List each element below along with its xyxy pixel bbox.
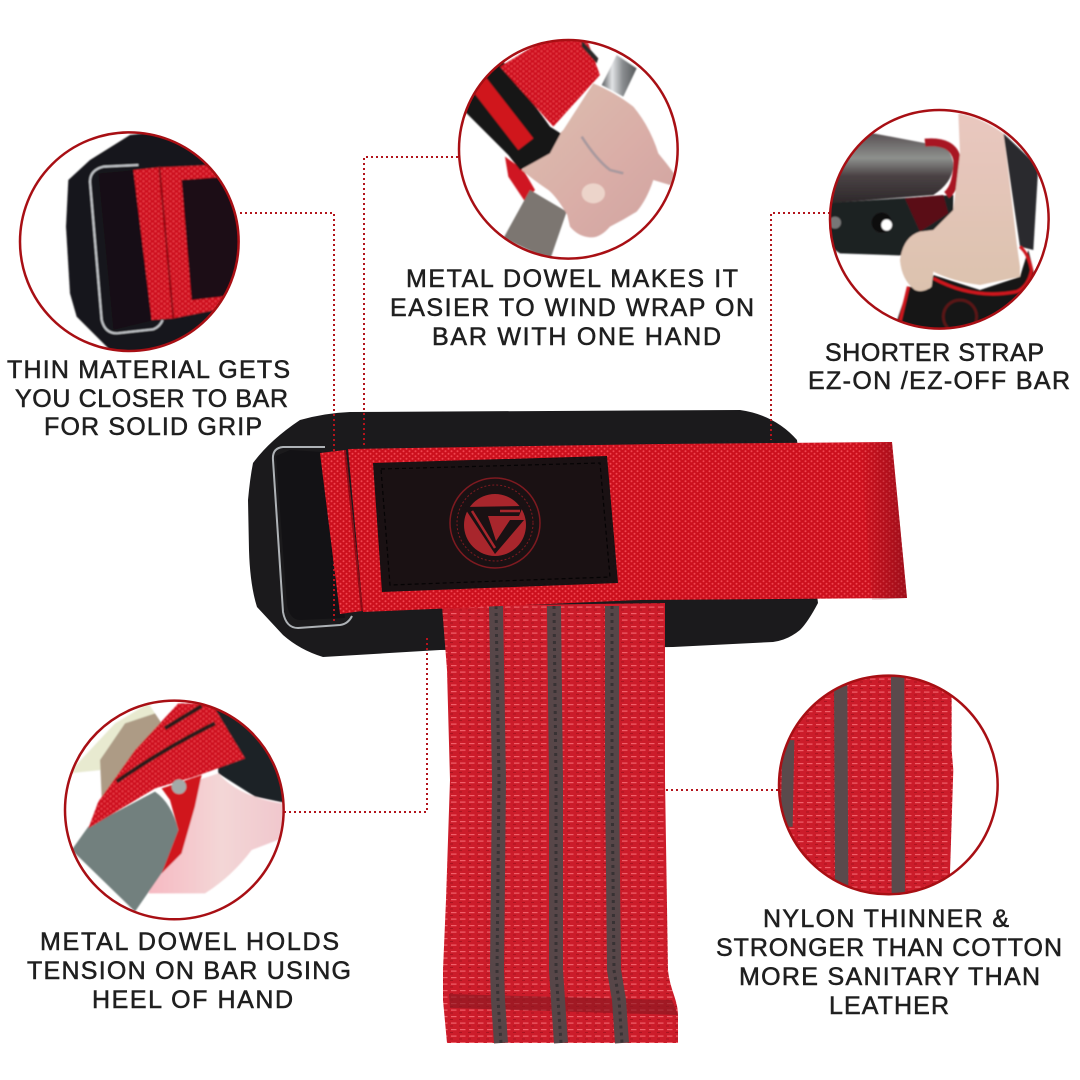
callout: metal dowel winding <box>390 30 754 351</box>
heading text: shorter strap <box>808 339 1070 395</box>
heading text: heel of hand tension: TENSION ON BAR USING <box>27 957 351 985</box>
dotted leader: metal dowel top <box>364 157 458 446</box>
heading text: heel of hand tension <box>27 928 351 1014</box>
heading text: nylon material: NYLON THINNER & <box>763 905 1009 933</box>
heading text: nylon material: STRONGER THAN COTTON <box>716 934 1062 962</box>
circle photo: nylon close-up <box>778 674 999 896</box>
heading text: nylon material: MORE SANITARY THAN <box>739 963 1040 991</box>
circle photo: hand gripping dowel <box>458 38 679 260</box>
callout: shorter strap <box>808 100 1070 395</box>
heading text: shorter strap: EZ-ON /EZ-OFF BAR <box>808 367 1070 395</box>
heading text: thin material: FOR SOLID GRIP <box>44 413 262 441</box>
red webbing strap <box>320 442 907 614</box>
logo on patch <box>450 478 540 568</box>
heading text: shorter strap: SHORTER STRAP <box>825 339 1044 367</box>
heading text: metal dowel winding: METAL DOWEL MAKES IT <box>406 265 738 293</box>
heading text: metal dowel winding: BAR WITH ONE HAND <box>432 323 721 351</box>
callout: heel of hand tension <box>27 690 351 1014</box>
black neoprene wrist pad <box>248 410 818 657</box>
heading text: nylon material <box>716 905 1062 1020</box>
heading text: nylon material: LEATHER <box>829 992 949 1020</box>
main product: wrist strap <box>240 157 907 1043</box>
folded strap end <box>320 450 362 614</box>
callout: nylon material <box>666 670 1062 1020</box>
heading text: heel of hand tension: METAL DOWEL HOLDS <box>40 928 339 956</box>
dotted leader: heel of hand <box>284 638 427 812</box>
metal ring buckle <box>273 447 352 628</box>
lower nylon tail with dark stripes <box>442 603 678 1043</box>
callout: thin material <box>7 120 290 441</box>
circle photo: dowel held by heel of hand <box>64 699 285 920</box>
black leather patch <box>373 456 618 592</box>
circle photo: hand on pull-up bar <box>828 108 1050 330</box>
dotted leader: nylon <box>666 789 778 791</box>
heading text: thin material: THIN MATERIAL GETS <box>7 356 290 384</box>
heading text: thin material: YOU CLOSER TO BAR <box>15 385 288 413</box>
dotted leader: shorter strap <box>771 213 830 440</box>
heading text: metal dowel winding: EASIER TO WIND WRAP ON <box>390 294 754 322</box>
heading text: thin material <box>7 356 290 441</box>
heading text: metal dowel winding <box>390 265 754 351</box>
dotted leader: thin material <box>240 213 334 622</box>
heading text: heel of hand tension: HEEL OF HAND <box>92 986 293 1014</box>
circle photo: pad and ring close-up <box>18 131 240 352</box>
